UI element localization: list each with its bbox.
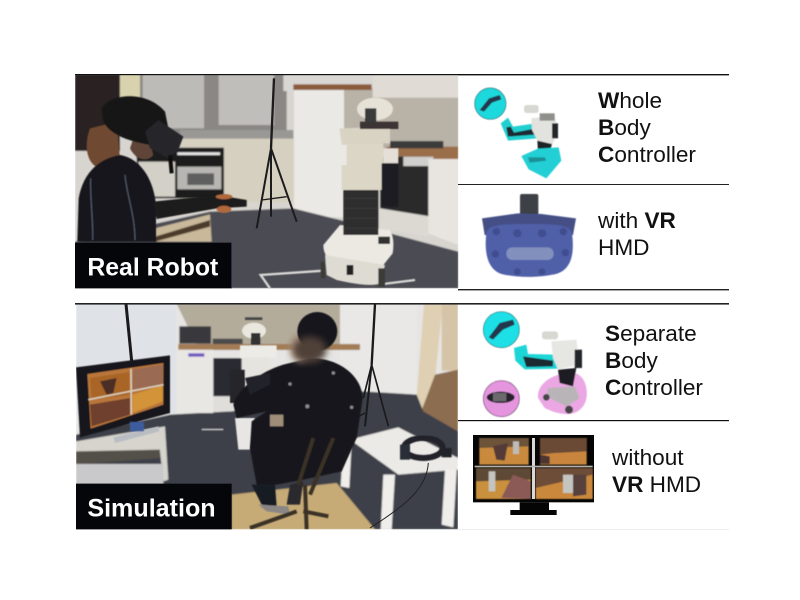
upper cabinet [372, 86, 458, 98]
window [140, 74, 287, 138]
bottom right: separate body controller icons [483, 312, 587, 417]
table right [350, 427, 458, 475]
door [416, 304, 442, 408]
top right: whole body controller icons [475, 88, 561, 178]
tripod [257, 78, 297, 228]
dark corner [75, 74, 120, 151]
kitchen [178, 344, 360, 350]
table left [76, 426, 168, 481]
monitor [137, 148, 224, 198]
VR headset on table [400, 438, 452, 460]
wall right [282, 75, 288, 92]
panel: real robot photo [75, 74, 458, 288]
text: Separate Body Controller: Separate [605, 321, 697, 346]
person with headset [77, 96, 247, 242]
kitchen counter [387, 147, 458, 159]
text: with VR HMD: HMD [598, 235, 649, 260]
text: Whole Body Controller: Whole [598, 88, 662, 113]
text: without VR HMD: VR HMD [612, 472, 701, 497]
floor [76, 391, 458, 529]
label: Real Robot [75, 243, 232, 288]
robot [321, 98, 398, 287]
text: with VR HMD: with VR [598, 208, 676, 233]
floor marking [261, 271, 415, 288]
panel: simulation photo [76, 304, 458, 529]
label: Simulation [76, 484, 232, 529]
tripods [126, 304, 388, 426]
floor [75, 208, 458, 288]
monitor with four camera views [76, 355, 170, 443]
text: Whole Body Controller: Controller [598, 142, 696, 167]
text: Separate Body Controller: Controller [605, 375, 703, 400]
robot in background [202, 317, 277, 450]
desk [155, 214, 212, 242]
text: Whole Body Controller: Body [598, 115, 651, 140]
seated person [233, 358, 363, 529]
mat [232, 483, 375, 529]
text: Separate Body Controller: Body [605, 348, 658, 373]
label: Simulation: Simulation [87, 494, 216, 522]
label: Real Robot: Real Robot [87, 253, 219, 281]
wall under window [180, 139, 297, 202]
blurred head [290, 312, 337, 363]
monitor icon with camera views [473, 435, 594, 515]
text: without VR HMD: without [611, 445, 684, 470]
tall fridge cabinet [294, 89, 344, 217]
infographic [75, 74, 729, 530]
VR headset icon [482, 194, 576, 277]
